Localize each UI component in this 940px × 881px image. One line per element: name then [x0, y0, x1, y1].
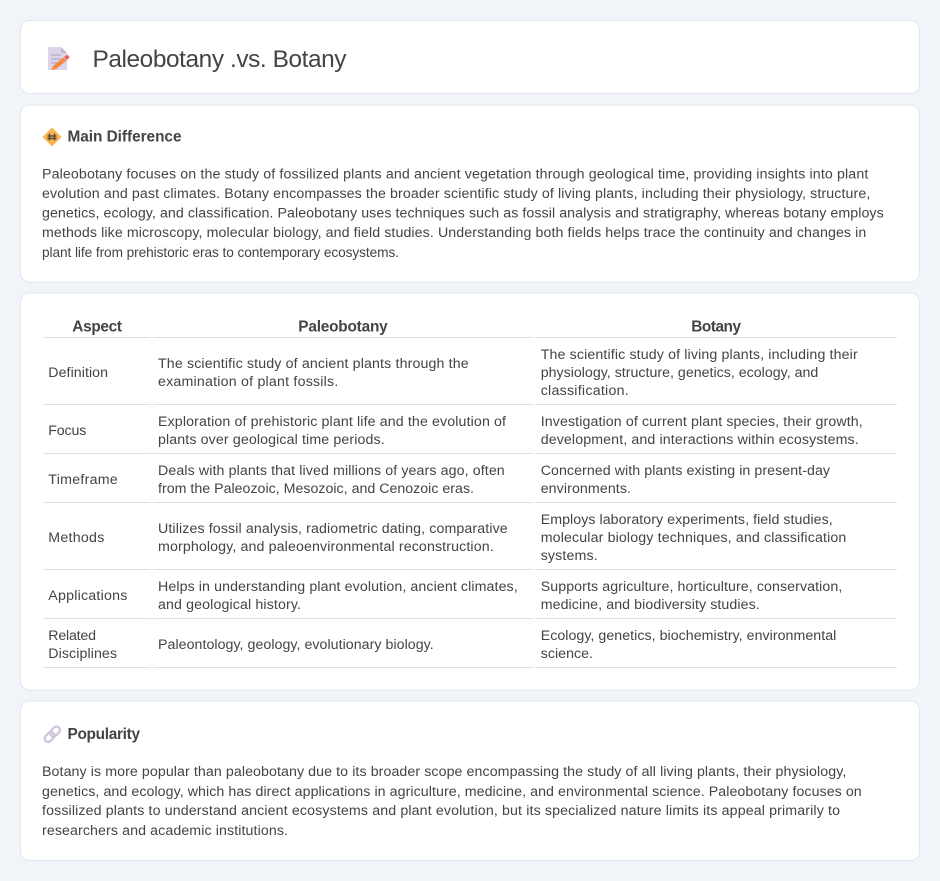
table row: methods: morphology, and paleoenvironmental reconstruction. — [158, 539, 494, 555]
table row: methods: Utilizes fossil analysis, radiometric dating, comparative — [158, 521, 508, 537]
text block: popularity: Botany is more popular than paleobotany due to its broader scope encompassing the study of all living plants, their physiology, — [42, 764, 846, 780]
table row: methods: Methods — [48, 530, 104, 546]
table row: focus — [43, 414, 897, 454]
text block: main difference: Paleobotany focuses on the study of fossilized plants and ancient vegetation through geological time, providing insights into plant — [42, 166, 868, 182]
table row: timeframe: from the Paleozoic, Mesozoic, and Cenozoic eras. — [158, 481, 474, 497]
table row: applications: medicine, and biodiversity studies. — [541, 597, 760, 613]
table row: related disciplines: Paleontology, geology, evolutionary biology. — [158, 637, 434, 653]
panel: comparison table — [20, 293, 920, 690]
table row: definition: examination of plant fossils. — [158, 374, 338, 390]
table row: methods: systems. — [541, 548, 598, 564]
heading: popularity: Popularity — [68, 726, 140, 743]
icon: document with pencil — [48, 47, 69, 70]
table row: timeframe: Timeframe — [48, 472, 118, 488]
table row: focus: Exploration of prehistoric plant life and the evolution of — [158, 414, 506, 430]
table header row — [43, 318, 897, 338]
text block: popularity — [42, 764, 862, 839]
table row: definition: Definition — [48, 365, 108, 381]
table row: related disciplines: Related — [48, 628, 96, 644]
text block: main difference — [42, 166, 884, 260]
table row: timeframe: environments. — [541, 481, 631, 497]
table row: definition: The scientific study of living plants, including their — [541, 347, 858, 363]
table row: methods: Employs laboratory experiments, field studies, — [541, 512, 833, 528]
title: Paleobotany .vs. Botany — [92, 46, 347, 73]
table row: definition: classification. — [541, 383, 629, 399]
table row: definition: physiology, structure, genetics, ecology, and — [541, 365, 818, 381]
table header row: Botany — [691, 318, 741, 336]
panel: main difference — [20, 105, 920, 282]
table row: applications — [43, 579, 897, 619]
table row: related disciplines: Ecology, genetics, biochemistry, environmental — [541, 628, 836, 644]
panel: title header — [20, 20, 920, 94]
table row: definition: The scientific study of ancient plants through the — [158, 356, 469, 372]
text block: main difference: methods like microscopy, molecular biology, and field studies. Understanding both fields helps trace the continuity and changes in — [42, 225, 866, 241]
table row: related disciplines — [43, 628, 897, 668]
text block: popularity: fossilized plants to understand ancient ecosystems and plant evolution, but its specialized nature limits its appeal primarily to — [42, 803, 840, 819]
table row: definition — [43, 347, 897, 405]
table row: applications: Helps in understanding plant evolution, ancient climates, — [158, 579, 518, 595]
table row: focus: development, and interactions within ecosystems. — [541, 432, 859, 448]
text block: main difference: evolution and past climates. Botany encompasses the broader scientific study of living plants, including their physiology, structure, — [42, 186, 870, 202]
table header row: Paleobotany — [298, 318, 388, 336]
heading: main difference: Main Difference — [68, 128, 182, 146]
table row: timeframe — [43, 463, 897, 503]
table row: methods — [43, 512, 897, 570]
table row: related disciplines: Disciplines — [48, 646, 117, 662]
table header row: Aspect — [72, 318, 122, 336]
table row: methods: molecular biology techniques, and classification — [541, 530, 846, 546]
panel: popularity — [20, 701, 920, 860]
text block: popularity: researchers and academic institutions. — [42, 823, 288, 839]
table row: timeframe: Concerned with plants existing in present-day — [541, 463, 831, 479]
table row: applications: Applications — [48, 588, 127, 604]
icon: warning diamond — [44, 128, 60, 146]
text block: popularity: genetics, and ecology, which has direct applications in agriculture, medicine, and environmental science. Paleobotany focuses on — [42, 784, 862, 800]
table row: focus: Focus — [48, 423, 86, 439]
table row: applications: and geological history. — [158, 597, 301, 613]
table row: focus: Investigation of current plant species, their growth, — [541, 414, 863, 430]
text block: main difference: plant life from prehistoric eras to contemporary ecosystems. — [42, 245, 399, 260]
table row: focus: plants over geological time periods. — [158, 432, 385, 448]
table row: related disciplines: science. — [541, 646, 593, 662]
table row: applications: Supports agriculture, horticulture, conservation, — [541, 579, 842, 595]
icon: chain link — [43, 725, 61, 743]
table row: timeframe: Deals with plants that lived millions of years ago, often — [158, 463, 505, 479]
text block: main difference: genetics, ecology, and classification. Paleobotany uses techniques such as fossil analysis and stratigraphy, whereas botany employs — [42, 206, 884, 222]
